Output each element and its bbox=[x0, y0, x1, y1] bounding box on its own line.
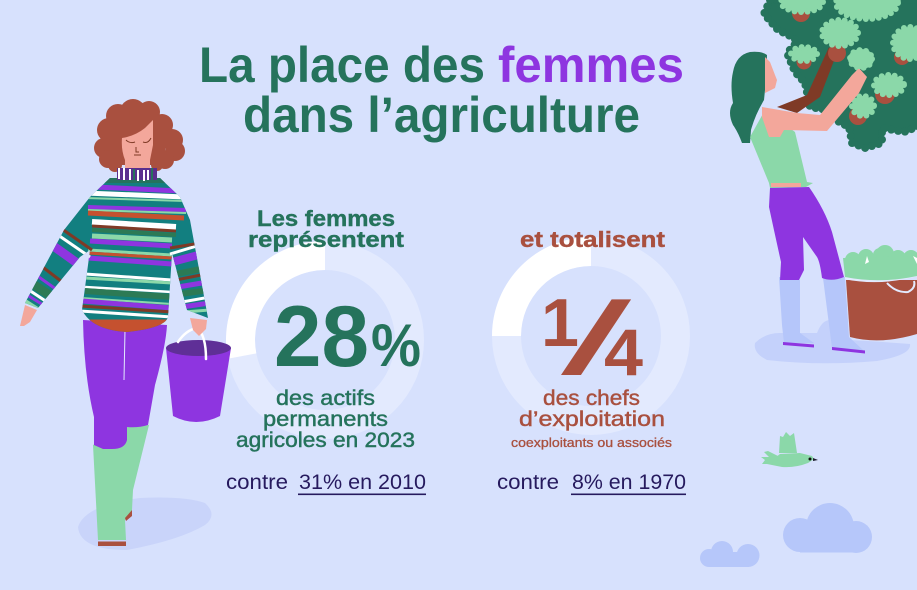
big fraction: 1/4: 4 bbox=[604, 315, 643, 389]
right hand bbox=[190, 318, 207, 336]
title: femmes bbox=[498, 37, 684, 93]
hand leaf bbox=[848, 49, 874, 69]
heading: les femmes représentent: représentent bbox=[248, 227, 405, 252]
top bbox=[750, 110, 813, 188]
waist bbox=[771, 183, 801, 187]
sweater bbox=[20, 175, 215, 335]
heading: les femmes représentent bbox=[248, 206, 405, 252]
comparison: contre 31% en 2010: 31% en 2010 bbox=[299, 471, 426, 494]
arm bbox=[762, 68, 867, 137]
trousers bbox=[769, 187, 844, 280]
title bbox=[199, 37, 684, 143]
illustration: picking woman shadow and basket bbox=[755, 187, 917, 363]
comparison: contre 8% en 1970: contre bbox=[497, 471, 559, 494]
donut chart: 28% bbox=[226, 241, 410, 424]
text: des actifs permanents agricoles en 2023: permanents bbox=[263, 408, 388, 431]
title: dans l’agriculture bbox=[243, 87, 640, 143]
illustration: small cloud bbox=[700, 541, 760, 567]
comparison: contre 8% en 1970 bbox=[497, 471, 686, 495]
sleeve stripes bbox=[58, 235, 90, 257]
heading: les femmes représentent: Les femmes bbox=[257, 206, 395, 231]
heading: et totalisent: et totalisent bbox=[520, 227, 666, 252]
big fraction: 1/4: / bbox=[561, 281, 632, 396]
branch bbox=[777, 47, 835, 113]
big number: 28%: % bbox=[371, 312, 421, 379]
donut chart: 1/4 bbox=[492, 237, 676, 420]
face bbox=[122, 120, 153, 172]
big fraction: 1/4 bbox=[541, 281, 643, 396]
text: coexploitants ou associés: coexploitants ou associés bbox=[511, 436, 672, 450]
basket leaves bbox=[843, 245, 917, 280]
basket bbox=[846, 280, 917, 340]
hair bbox=[94, 99, 185, 172]
illustration: tree bbox=[764, 0, 917, 148]
illustration: picking woman bbox=[730, 49, 874, 188]
bucket bbox=[166, 348, 231, 422]
boots bbox=[779, 277, 814, 343]
illustration: large cloud bbox=[783, 503, 872, 553]
face bbox=[765, 57, 777, 93]
big number: 28% bbox=[274, 289, 421, 385]
comparison: contre 31% en 2010: contre bbox=[226, 471, 288, 494]
illustration: woman with bucket bbox=[20, 99, 231, 550]
soles bbox=[783, 342, 865, 354]
text: des chefs d'exploitation bbox=[519, 387, 665, 431]
text: des actifs permanents agricoles en 2023 bbox=[236, 387, 415, 452]
foliage bbox=[764, 0, 917, 148]
big fraction: 1/4: 1 bbox=[541, 285, 579, 361]
big number: 28%: 28 bbox=[274, 289, 369, 385]
text: des actifs permanents agricoles en 2023: des actifs bbox=[276, 387, 375, 410]
hair bbox=[730, 52, 767, 143]
legs bbox=[93, 425, 149, 540]
title: La place des bbox=[199, 37, 485, 93]
illustration: bird bbox=[761, 432, 818, 467]
ground shadow bbox=[78, 498, 212, 550]
comparison: contre 8% en 1970: 8% en 1970 bbox=[572, 471, 686, 494]
text: des actifs permanents agricoles en 2023: agricoles en 2023 bbox=[236, 429, 415, 452]
text: des chefs d'exploitation: des chefs bbox=[543, 387, 640, 410]
fruits bbox=[792, 4, 910, 125]
text: des chefs d'exploitation: d’exploitation bbox=[519, 408, 665, 431]
left hand bbox=[20, 305, 37, 326]
collar bbox=[117, 168, 157, 180]
leaves bbox=[781, 0, 917, 116]
comparison: contre 31% en 2010 bbox=[226, 471, 426, 495]
